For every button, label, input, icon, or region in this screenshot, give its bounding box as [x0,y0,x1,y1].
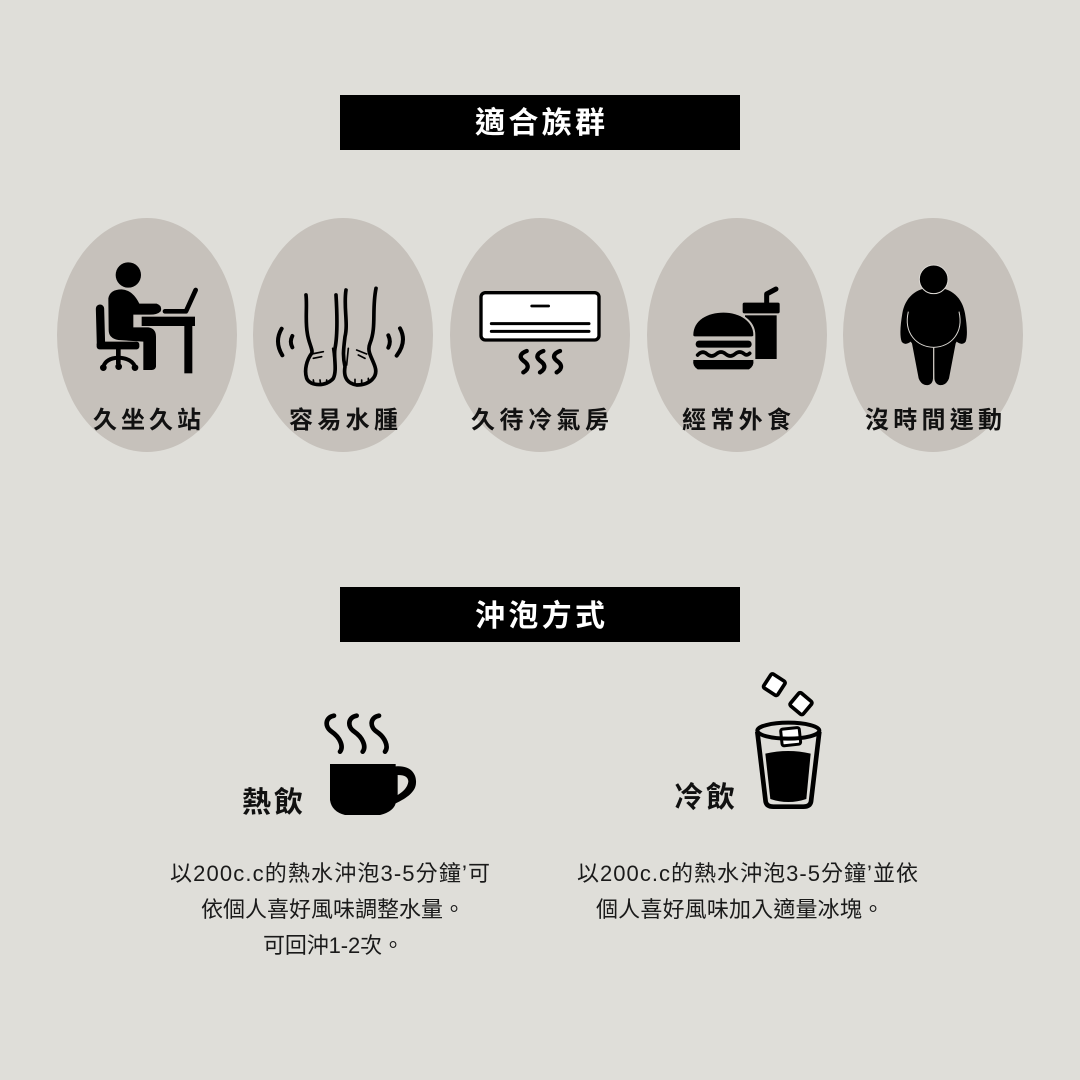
text: cold drink instructions [577,861,918,922]
icon: overweight person [900,265,967,385]
icon: swollen feet [278,288,403,385]
heading: suitable groups [340,95,740,150]
label: 久坐久站 [93,407,201,434]
label: 沒時間運動 [865,407,1002,434]
icon: steaming cup [327,716,416,815]
icon: air conditioner [481,293,599,372]
heading: brewing method [340,587,740,642]
panel: no time to exercise [843,218,1023,452]
label: cold drink: 冷飲 [674,781,735,814]
label: 久待冷氣房 [471,407,609,434]
label: 容易水腫 [289,407,398,434]
text: cold drink instructions: 以200c.c的熱水沖泡3-5分鐘’並依 [577,861,918,886]
text: hot drink instructions: 依個人喜好風味調整水量。 [201,897,465,922]
icon: glass with ice [757,673,819,807]
text: hot drink instructions: 可回沖1-2次。 [263,933,404,958]
text: hot drink instructions [170,861,490,958]
heading: suitable groups: 適合族群 [475,107,605,140]
icon: person at desk [97,262,196,373]
text: cold drink instructions: 個人喜好風味加入適量冰塊。 [596,897,884,922]
panel: swelling [253,218,433,452]
heading: brewing method: 沖泡方式 [475,600,605,633]
panel: cold drink [577,673,918,922]
panel: hot drink [170,716,490,958]
label: 經常外食 [682,406,791,434]
panel: eating out [647,218,827,452]
panel: air conditioned room [450,218,630,452]
text: hot drink instructions: 以200c.c的熱水沖泡3-5分鐘’可 [170,861,490,886]
panel: sitting and standing [57,218,237,452]
label: hot drink: 熱飲 [242,786,303,819]
icon: burger and drink [693,289,780,369]
